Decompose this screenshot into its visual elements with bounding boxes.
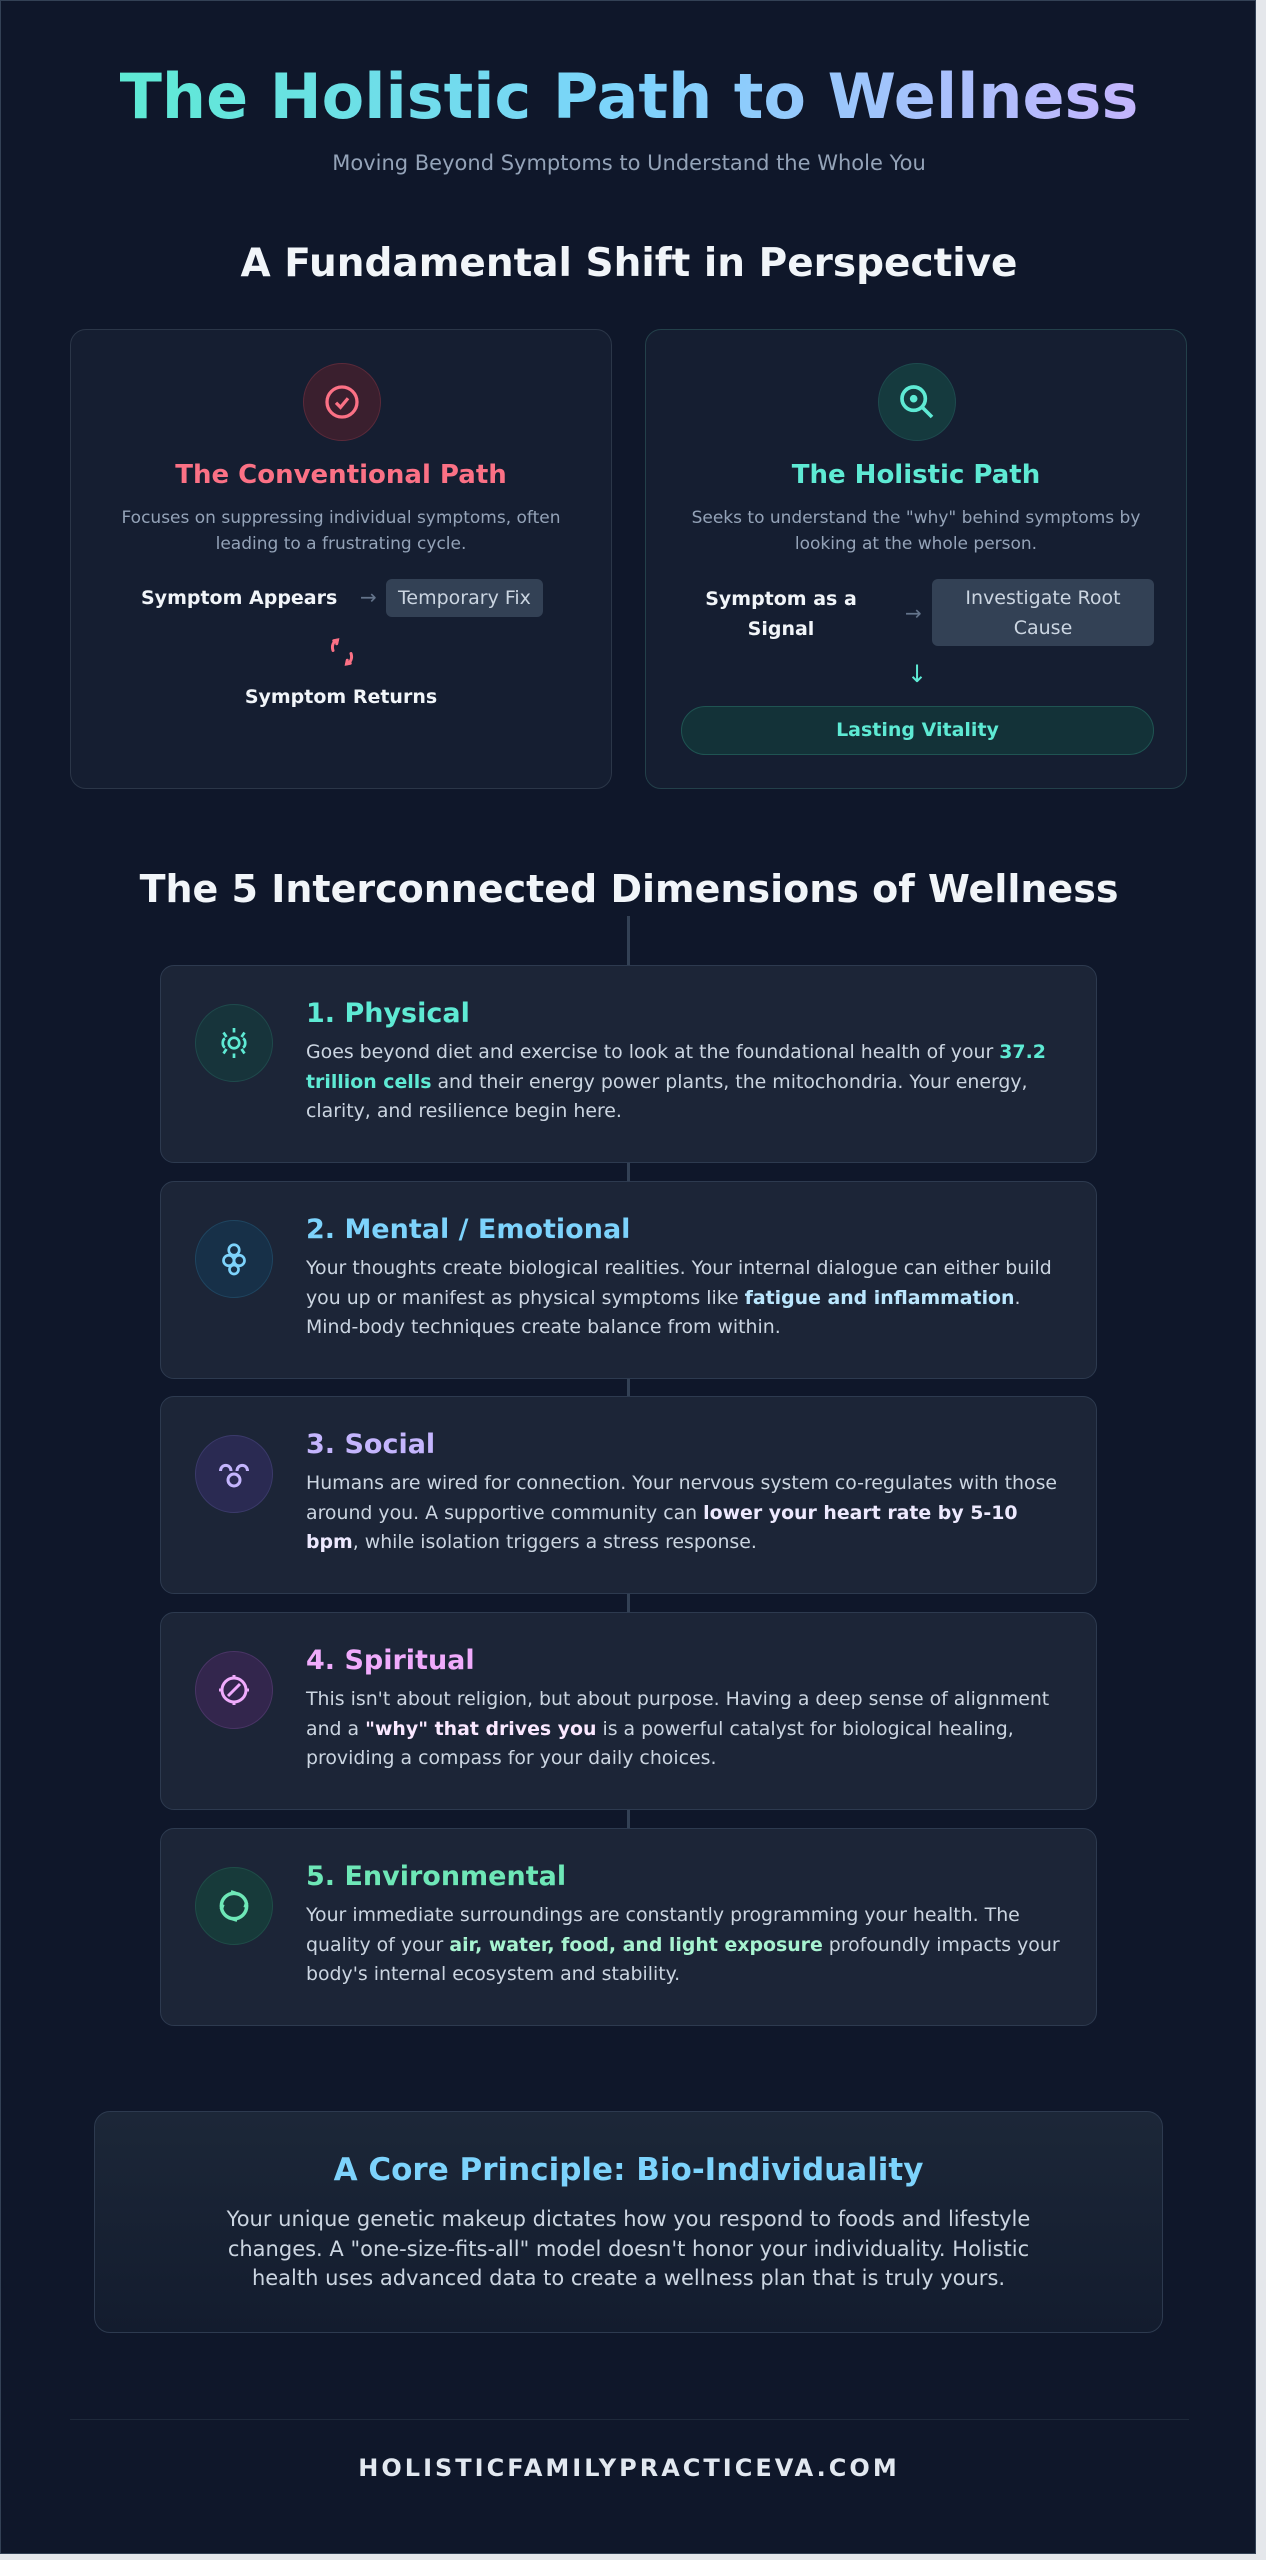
- icon: cycle: [330, 638, 354, 666]
- subtitle: Moving Beyond Symptoms to Understand the Whole You: [332, 151, 926, 175]
- card: mental: [160, 1181, 1097, 1379]
- heading: fundamental shift: A Fundamental Shift in Perspective: [241, 241, 1017, 286]
- card: environmental: 5. Environmental: [306, 1861, 566, 1892]
- card: spiritual: [160, 1612, 1097, 1810]
- footer: HOLISTICFAMILYPRACTICEVA.COM: [358, 2454, 900, 2482]
- flow: signal to investigate: →: [905, 601, 922, 625]
- icon: magnifier: [878, 363, 956, 441]
- card: social: 3. Social: [306, 1429, 435, 1460]
- timeline line: [627, 916, 630, 1856]
- description: Focuses on suppressing individual symptoms, often leading to a frustrating cycle.: [122, 508, 560, 554]
- icon: check circle: [303, 363, 381, 441]
- heading: 5 dimensions: The 5 Interconnected Dimensions of Wellness: [140, 867, 1118, 911]
- callout body: Your unique genetic makeup dictates how you respond to foods and lifestyle changes. A "one-size-fits-all" model doesn't honor your individuality. Holistic health uses advanced data to create a wellness plan that is truly yours.: [227, 2207, 1030, 2290]
- icon: social: [195, 1435, 273, 1513]
- arrow down: ↓: [907, 660, 927, 688]
- card title: The Holistic Path: [792, 460, 1040, 490]
- card: spiritual: 4. Spiritual: [306, 1645, 475, 1676]
- card: physical: Goes beyond diet and exercise to look at the foundational health of your 37.2 trillion cells and their energy power plants, the mitochondria. Your energy, clarity, and resilience begin here.: [306, 1041, 1046, 1122]
- card title: The Conventional Path: [175, 460, 507, 490]
- pill: lasting vitality: [681, 706, 1154, 755]
- icon: cell: [195, 1004, 273, 1082]
- flow: signal to investigate: Investigate Root Cause: [965, 587, 1121, 639]
- panel: conventional path: [70, 329, 612, 789]
- card: mental: Your thoughts create biological realities. Your internal dialogue can either build you up or manifest as physical symptoms like fatigue and inflammation. Mind‑body techniques create balance from within.: [306, 1257, 1052, 1338]
- card: environmental: Your immediate surroundings are constantly programming your health. The quality of your air, water, food, and light exposure profoundly impacts your body's internal ecosystem and stability.: [306, 1904, 1060, 1985]
- card: environmental: [160, 1828, 1097, 2026]
- callout: bio-individuality: [94, 2111, 1163, 2333]
- flow: signal to investigate: [705, 579, 1154, 646]
- callout title: A Core Principle: Bio-Individuality: [334, 2152, 923, 2188]
- icon: recycle: [195, 1867, 273, 1945]
- flow: symptom to fix: Temporary Fix: [398, 587, 531, 609]
- card: physical: [160, 965, 1097, 1163]
- flow: symptom to fix: [141, 579, 543, 617]
- pill: lasting vitality: Lasting Vitality: [836, 719, 999, 741]
- text: symptom returns: Symptom Returns: [245, 686, 437, 708]
- card: social: Humans are wired for connection. Your nervous system co-regulates with those around you. A supportive community can lower your heart rate by 5-10 bpm, while isolation triggers a stress response.: [306, 1472, 1057, 1553]
- icon: compass: [195, 1651, 273, 1729]
- icon: brain: [195, 1220, 273, 1298]
- card: spiritual: This isn't about religion, but about purpose. Having a deep sense of alignment and a "why" that drives you is a powerful catalyst for biological healing, providing a compass for your daily choices.: [306, 1688, 1049, 1769]
- card: physical: 1. Physical: [306, 998, 470, 1029]
- flow: symptom to fix: Symptom Appears: [141, 587, 337, 609]
- title: The Holistic Path to Wellness: [120, 60, 1138, 133]
- card: social: [160, 1396, 1097, 1594]
- flow: symptom to fix: →: [360, 585, 377, 609]
- flow: signal to investigate: Symptom as a Signal: [705, 588, 857, 640]
- description: Seeks to understand the "why" behind symptoms by looking at the whole person.: [692, 508, 1140, 554]
- card: mental: 2. Mental / Emotional: [306, 1214, 630, 1245]
- panel: holistic path: [645, 329, 1187, 789]
